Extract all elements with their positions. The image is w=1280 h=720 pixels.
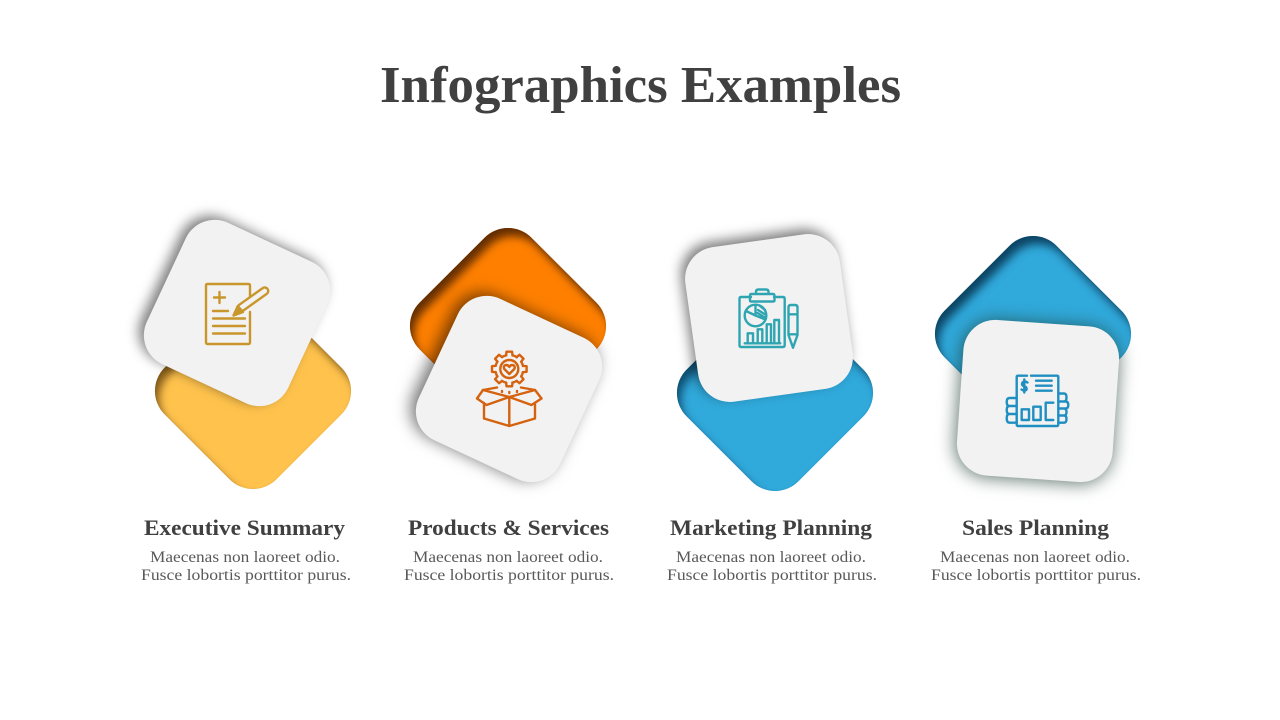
panel: sales planning [931,236,1141,584]
description [404,549,614,584]
heading: Executive Summary [144,515,345,540]
panel: marketing planning [667,220,877,584]
heading: Products & Services [408,515,609,540]
description: Fusce lobortis porttitor purus. [931,567,1141,584]
orange diamond [396,214,620,438]
description: Maecenas non laoreet odio. [150,549,340,566]
heading: Marketing Planning [670,515,872,540]
white card [672,220,858,405]
description [141,549,351,584]
description [931,549,1141,584]
panel: products and services [400,228,614,584]
panel: executive summary [130,208,352,584]
yellow diamond [141,279,365,503]
icon: report with coins [1006,374,1070,428]
blue diamond [921,222,1145,446]
icon: clipboard with charts and pencil [738,288,799,349]
white card [400,282,608,490]
description: Fusce lobortis porttitor purus. [141,567,351,584]
description: Fusce lobortis porttitor purus. [667,567,877,584]
description: Fusce lobortis porttitor purus. [404,567,614,584]
blue diamond [663,281,887,505]
description: Maecenas non laoreet odio. [940,549,1130,566]
description: Maecenas non laoreet odio. [413,549,603,566]
white card [130,208,334,410]
icon: document with pen [204,282,270,346]
description: Maecenas non laoreet odio. [676,549,866,566]
white card [942,308,1132,497]
icon: box with gear [476,350,543,428]
title: Infographics Examples [380,57,901,114]
description [667,549,877,584]
heading: Sales Planning [962,515,1109,540]
